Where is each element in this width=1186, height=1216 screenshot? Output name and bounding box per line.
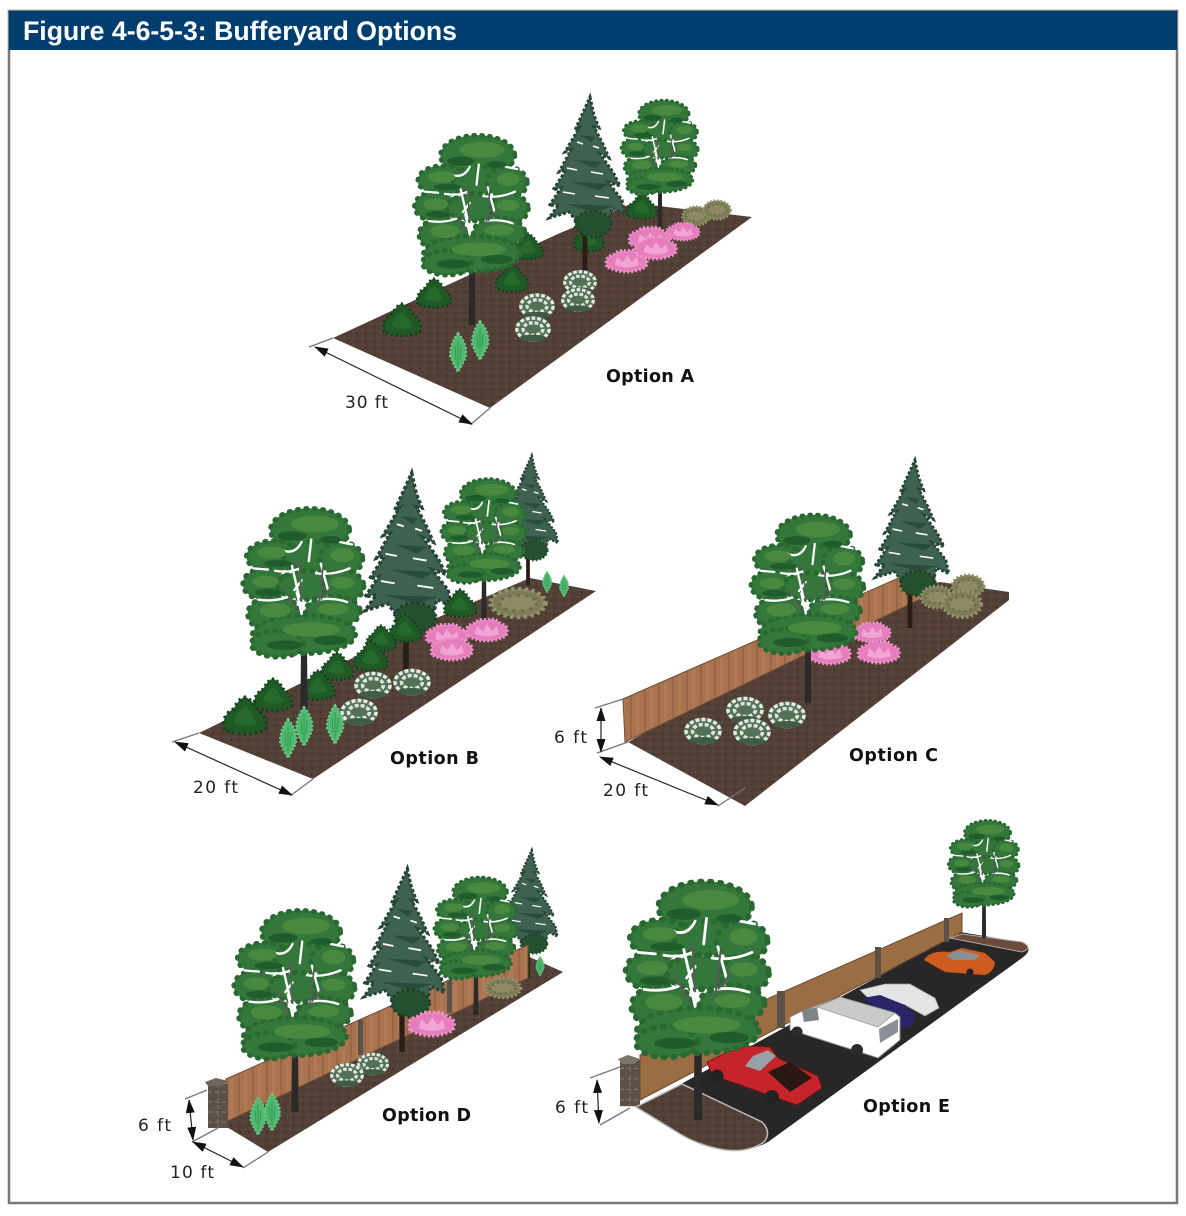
corner post D bbox=[205, 1078, 228, 1128]
dimension 10 ft D: 10 ft bbox=[170, 1163, 214, 1183]
dark shrubs A bbox=[383, 194, 657, 336]
white van bbox=[790, 997, 900, 1058]
label Option C: Option C bbox=[849, 746, 938, 766]
deciduous tree E front bbox=[626, 881, 769, 1120]
pink shrubs A bbox=[606, 223, 699, 272]
dimension 6 ft D: 6 ft bbox=[138, 1116, 171, 1136]
conifer A bbox=[549, 97, 625, 270]
dimension 20 ft B: 20 ft bbox=[193, 778, 238, 798]
conifer D mid bbox=[364, 869, 444, 1052]
dimension 20 ft C: 20 ft bbox=[603, 781, 648, 801]
dimension 30 ft: 30 ft bbox=[345, 393, 388, 413]
dimension 6 ft D bbox=[138, 1090, 218, 1142]
white shrubs B bbox=[340, 668, 431, 726]
shrubs D bbox=[330, 956, 544, 1087]
label Option A: Option A bbox=[606, 367, 694, 387]
deciduous tree D back bbox=[434, 877, 517, 1015]
corner post E bbox=[618, 1055, 640, 1106]
panel: Option B bbox=[172, 455, 596, 798]
header bar with title: Figure 4-6-5-3: Bufferyard Options bbox=[23, 16, 457, 46]
mulch island right E bbox=[950, 934, 1028, 952]
deciduous tree B back bbox=[441, 479, 526, 620]
mulch island left E bbox=[636, 1084, 768, 1151]
orange car bbox=[924, 948, 995, 976]
deciduous tree B front bbox=[243, 508, 364, 710]
asphalt parking E bbox=[637, 932, 1029, 1151]
white shrubs C bbox=[684, 696, 806, 746]
mulch ground A bbox=[333, 203, 752, 408]
conifer D back bbox=[501, 850, 558, 978]
navy car bbox=[862, 995, 915, 1030]
label Option D: Option D bbox=[382, 1106, 471, 1126]
deciduous tree A front bbox=[414, 135, 528, 325]
pink shrubs C bbox=[809, 622, 899, 664]
dimension 30 ft bbox=[309, 338, 490, 425]
upper grasses B bbox=[543, 572, 569, 597]
label Option E: Option E bbox=[863, 1097, 950, 1117]
panel: Option D bbox=[138, 850, 563, 1183]
dimension 20 ft B bbox=[172, 733, 313, 798]
pink shrubs B bbox=[426, 619, 507, 660]
panel: Option C bbox=[554, 460, 1009, 806]
fence D bbox=[226, 945, 528, 1122]
conifer B mid bbox=[365, 473, 452, 670]
dimension 10 ft D bbox=[170, 1142, 268, 1183]
fence C bbox=[623, 562, 935, 742]
deciduous tree E right bbox=[948, 820, 1019, 938]
tan shrub B bbox=[491, 589, 545, 617]
dark shrubs B bbox=[224, 590, 476, 734]
deciduous tree D front bbox=[234, 910, 355, 1112]
mulch ground B bbox=[199, 578, 596, 779]
deciduous tree C bbox=[751, 515, 864, 703]
panel: Option E bbox=[555, 820, 1029, 1151]
mulch ground D bbox=[222, 955, 563, 1152]
dimension 6 ft E bbox=[555, 1067, 630, 1125]
label Option B: Option B bbox=[390, 749, 479, 769]
grasses D bbox=[250, 1094, 280, 1135]
silver car bbox=[860, 984, 939, 1016]
panel: Option A bbox=[309, 97, 752, 425]
white shrubs A bbox=[515, 270, 597, 342]
grasses A bbox=[450, 321, 488, 372]
dimension 6 ft C: 6 ft bbox=[554, 728, 587, 748]
dimension 6 ft E: 6 ft bbox=[555, 1098, 588, 1118]
fence posts E bbox=[777, 918, 949, 1028]
mulch ground C bbox=[628, 582, 1009, 806]
conifer C bbox=[875, 460, 949, 628]
deciduous tree A right bbox=[621, 100, 698, 228]
tan shrubs C bbox=[921, 575, 984, 617]
conifer B back bbox=[501, 455, 558, 585]
tan shrubs A bbox=[682, 201, 731, 225]
dimension 20 ft C bbox=[600, 757, 745, 806]
fence posts D bbox=[358, 980, 452, 1055]
dimension 6 ft C bbox=[554, 699, 628, 753]
fence E bbox=[640, 913, 962, 1100]
red truck bbox=[707, 1046, 822, 1105]
header bar with title bbox=[9, 11, 1177, 50]
grasses B bbox=[280, 705, 343, 758]
